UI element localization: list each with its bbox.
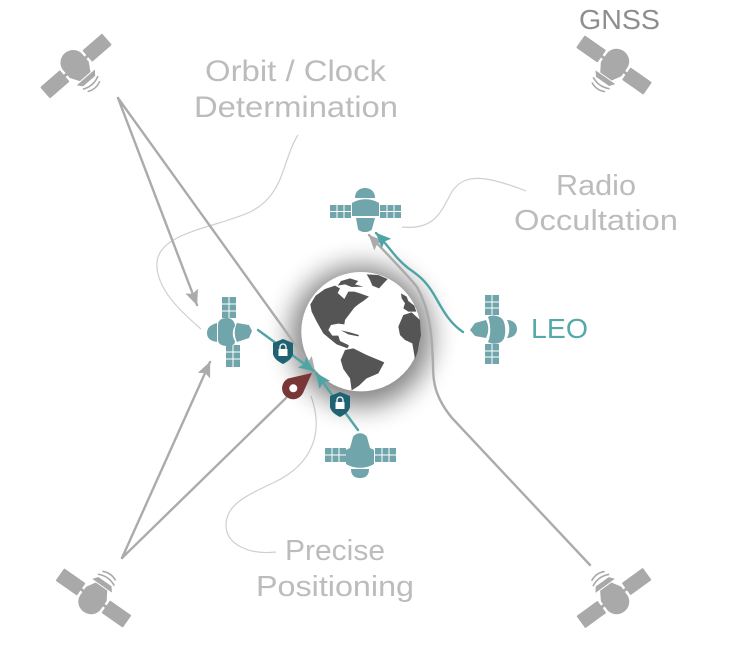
GNSS signal lines [118,98,590,565]
label: Radio Occultation: Radio [556,170,636,202]
label: Precise Positioning: Precise [285,535,385,567]
continent: Europe [401,293,416,312]
continent: South America [341,348,384,390]
continent: North America [310,286,369,348]
continent: Africa [398,312,421,359]
LEO satellite top (radio occultation) [330,188,401,232]
GNSS satellite bottom left [50,551,144,635]
globe [301,272,421,391]
callout lines [157,135,526,553]
continent: Caribbean islands [341,330,359,347]
GNSS satellite bottom right [564,550,657,636]
label: Precise Positioning: Positioning [256,571,414,603]
label: GNSS: GNSS [579,4,660,35]
position pin [282,373,312,399]
LEO satellite left [207,297,252,367]
GNSS satellite top left [34,26,126,115]
continent: Arctic islands [338,278,363,287]
lock shield 2 [330,392,350,417]
label: LEO: LEO [531,313,588,344]
LEO links [258,233,463,430]
GNSS satellite top right [564,28,657,112]
lock shield 1 [273,339,293,364]
continent: Greenland [367,274,388,288]
LEO satellite bottom [325,433,396,478]
label: Orbit / Clock Determination [194,55,398,124]
globe shadow [290,265,432,407]
label: Radio Occultation [514,170,678,237]
label: Orbit / Clock Determination: Orbit / Clock [205,55,387,88]
label: Radio Occultation: Occultation [514,205,678,237]
label: Precise Positioning [256,535,414,603]
label: Orbit / Clock Determination: Determination [194,91,398,124]
LEO satellite right [470,295,517,364]
